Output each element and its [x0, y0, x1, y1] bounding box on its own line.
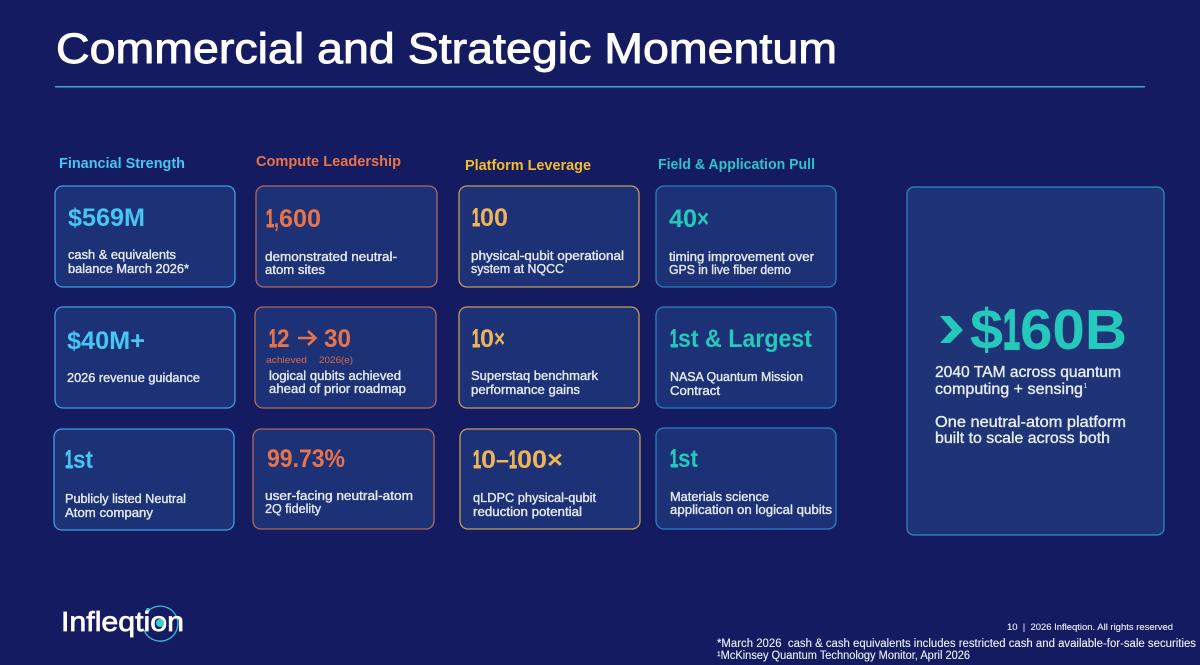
- description: timing improvement: [669, 250, 814, 277]
- panel: 40x timing: [656, 186, 836, 287]
- heading: Financial Strength: Financial Strength: [59, 156, 185, 172]
- description: materials science: application on logical qubits: [670, 503, 832, 517]
- description: platform: One neutral-atom platform: [935, 414, 1126, 431]
- description: benchmark gains: Superstaq benchmark: [471, 369, 599, 383]
- description: publicly listed: [65, 492, 186, 520]
- metric: 30: 30: [324, 325, 351, 353]
- label: achieved: achieved: [266, 355, 307, 365]
- metric: 1,600: 1,600: [266, 205, 321, 233]
- panel: $40M+ revenue guidance: [55, 307, 235, 408]
- metric: 99.73%: 99.73%: [267, 445, 345, 473]
- description: logical qubits: ahead of prior roadmap: [269, 382, 406, 396]
- description: cash and equivalents: cash & equivalents: [68, 248, 176, 262]
- description: materials science: Materials science: [670, 490, 769, 504]
- description: NASA contract: Contract: [670, 384, 721, 398]
- panel: 10-100x qLDPC: [460, 429, 640, 529]
- footnotes: *March 2026 cash & cash equivalents includes restricted cash and available-for-sale securities: [717, 638, 1196, 650]
- description: operational system: system at NQCC: [471, 262, 564, 276]
- metric: 1st: 1st: [65, 446, 94, 474]
- description: qLDPC reduction: [473, 491, 597, 519]
- metric: $40M+: $40M+: [67, 327, 145, 355]
- description: demonstrated sites: atom sites: [265, 263, 325, 277]
- panel: 99.73% fidelity: [253, 429, 434, 529]
- description: demonstrated sites: demonstrated neutral-: [265, 250, 397, 264]
- description: operational system: physical-qubit operational: [471, 249, 624, 263]
- footnotes: [717, 638, 1196, 662]
- description: publicly listed: Publicly listed Neutral: [65, 492, 186, 506]
- metric: $160B: $160B: [970, 298, 1127, 362]
- description: logical qubits: [269, 369, 406, 396]
- panel: 1st materials science: [656, 428, 836, 529]
- description: timing improvement: timing improvement over: [669, 250, 814, 264]
- title: Commercial and Strategic Momentum: [56, 25, 837, 73]
- description: TAM: [935, 364, 1121, 398]
- description: platform: [935, 414, 1126, 447]
- description: platform: built to scale across both: [935, 430, 1110, 447]
- panel: 1st and Largest NASA: [656, 307, 836, 408]
- panel: $569M cash: [55, 186, 235, 287]
- panel: $160B TAM: [907, 187, 1164, 535]
- description: fidelity: [265, 489, 413, 516]
- panel: 12 to 30 logical qubits: [255, 307, 436, 408]
- heading: Field & Application Pull: Field & Application Pull: [658, 157, 815, 173]
- panel: 100 physical qubits: [459, 186, 639, 287]
- metric: 40x: 40×: [669, 205, 709, 233]
- metric: 1st & Largest: 1st & Largest: [670, 325, 813, 353]
- panel: 1,600 sites: [256, 186, 437, 287]
- description: logical qubits: logical qubits achieved: [269, 369, 401, 383]
- heading: Compute Leadership: Compute Leadership: [256, 154, 401, 170]
- heading: Platform Leverage: Platform Leverage: [465, 158, 591, 174]
- description: demonstrated sites: [265, 250, 397, 277]
- icon: chevron: [940, 316, 963, 343]
- description: materials science: [670, 490, 832, 517]
- description: benchmark gains: [471, 369, 599, 397]
- description: qLDPC reduction: reduction potential: [473, 505, 582, 519]
- description: revenue guidance: 2026 revenue guidance: [67, 371, 200, 385]
- metric: 10x: 10×: [472, 325, 505, 353]
- metric: $569M: $569M: [68, 204, 145, 232]
- description: fidelity: 2Q fidelity: [265, 502, 322, 516]
- metric: 100: 100: [472, 204, 508, 232]
- description: cash and equivalents: [68, 248, 189, 276]
- description: cash and equivalents: balance March 2026*: [68, 262, 189, 276]
- description: fidelity: user-facing neutral-atom: [265, 489, 413, 503]
- description: TAM: 2040 TAM across quantum: [935, 364, 1121, 381]
- page number and copyright: 10 | 2026 Infleqtion. All rights reserved: [1007, 622, 1173, 632]
- description: TAM: computing + sensing: [935, 381, 1083, 398]
- description: TAM: 1: [1084, 383, 1088, 390]
- description: timing improvement: GPS in live fiber demo: [669, 263, 791, 277]
- logo: Infleqtion: Infleqtion: [61, 606, 184, 637]
- description: NASA contract: [670, 370, 803, 398]
- description: publicly listed: Atom company: [65, 506, 154, 520]
- metric: 1st: 1st: [670, 445, 699, 473]
- panel: 1st publicly listed: [54, 429, 234, 530]
- panel: 10x Superstaq: [459, 307, 639, 408]
- footnotes: ¹McKinsey Quantum Technology Monitor, April 2026: [717, 650, 970, 662]
- description: operational system: [471, 249, 624, 276]
- description: qLDPC reduction: qLDPC physical-qubit: [473, 491, 597, 505]
- label: 2026(e): 2026(e): [319, 355, 353, 365]
- arrow: 12 to 30: [298, 331, 316, 345]
- metric: 10-100x: 10–100×: [473, 446, 563, 474]
- description: NASA contract: NASA Quantum Mission: [670, 370, 803, 384]
- description: benchmark gains: performance gains: [471, 383, 580, 397]
- metric: 12: 12: [269, 325, 290, 353]
